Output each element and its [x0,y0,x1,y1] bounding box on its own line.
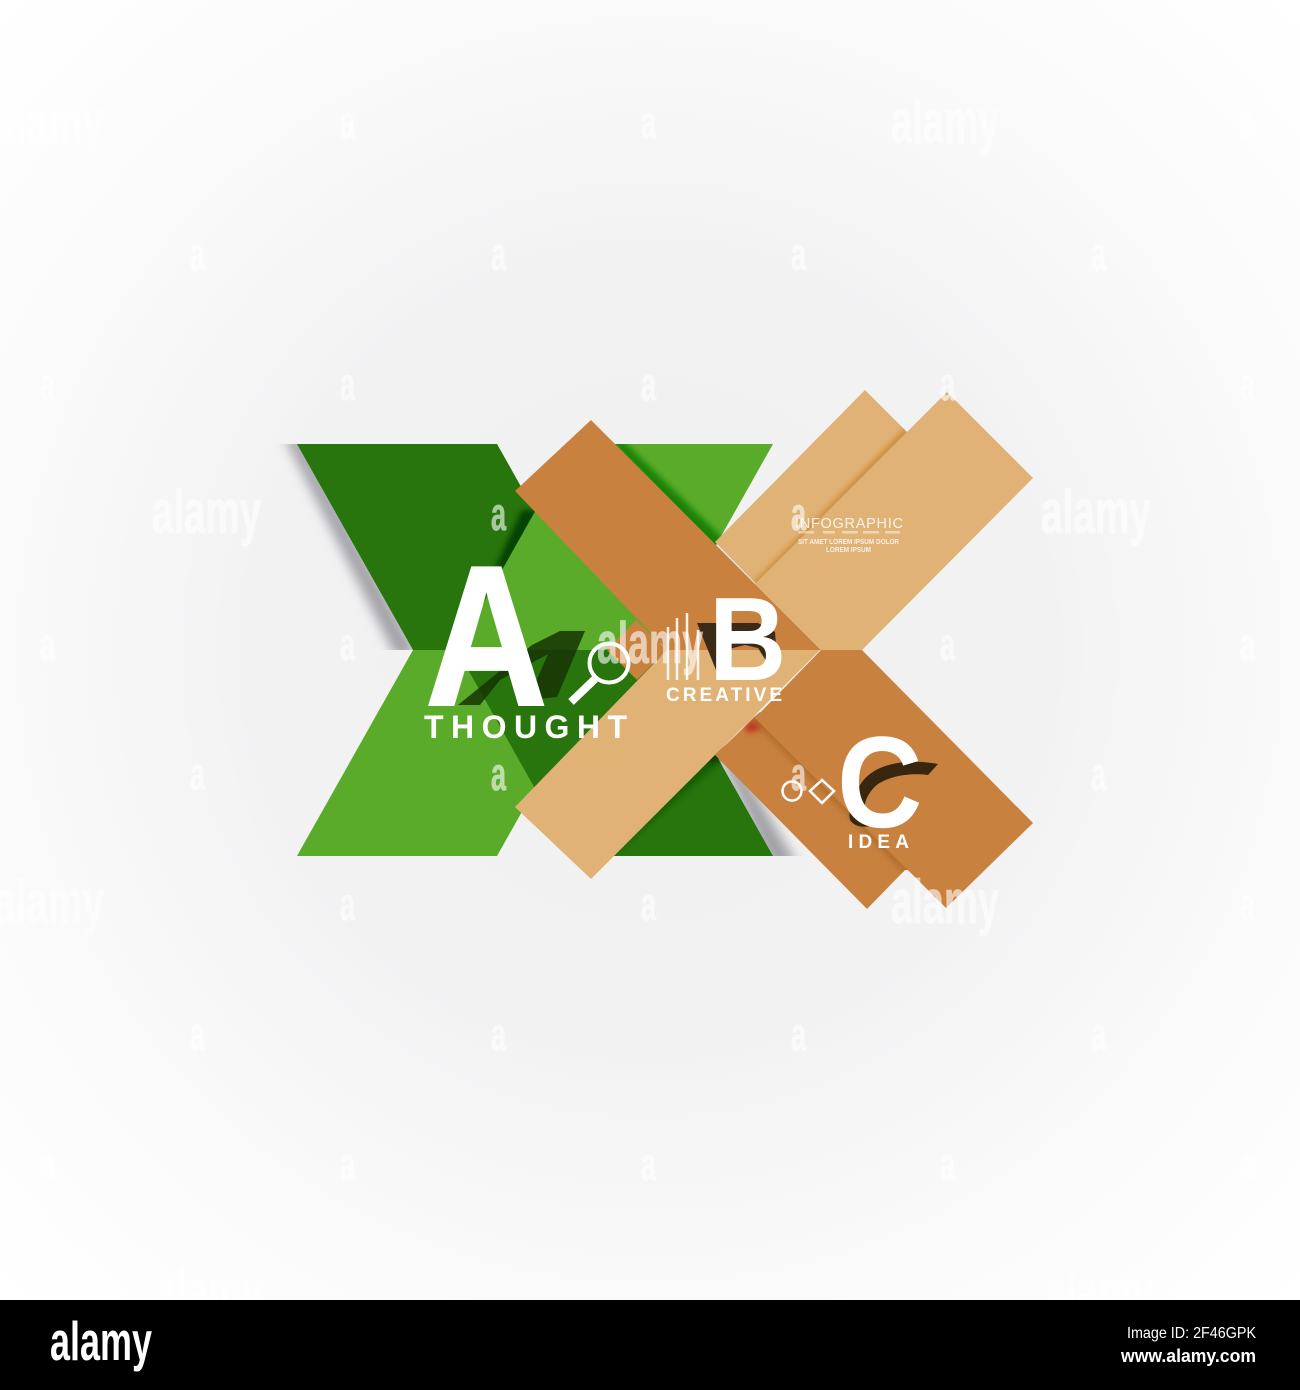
footer logo: alamy [50,1310,152,1372]
watermarks: a [1091,228,1106,280]
watermarks: a [491,748,506,800]
panel: upper right light green [457,444,773,650]
watermarks: a [641,878,656,930]
panel: rear brown bar [715,712,915,909]
brown diamond at centre [607,620,667,680]
watermarks: a [40,618,55,670]
watermarks: a [1240,1138,1255,1190]
footer bar [0,1300,1300,1390]
shadow: right of lower green panel [718,759,800,856]
label: THOUGHT: THOUGHT [424,709,627,745]
text block: infographic caption: LOREM IPSUM [826,545,871,554]
watermarks: a [1240,358,1255,410]
watermarks: a [791,488,806,540]
watermarks: a [340,1138,355,1190]
letter: A: A [425,525,548,748]
shadow on dark green along tan bar [616,758,721,854]
letter shadow: C [850,762,938,827]
text block: infographic caption [795,516,903,554]
watermarks: a [340,618,355,670]
watermarks: a [791,1008,806,1060]
watermarks: a [40,1138,55,1190]
shadow: left of upper green panel [284,436,418,656]
letter: B: B [709,573,786,705]
watermarks: alamy [891,88,999,157]
watermarks: a [340,358,355,410]
watermarks: a [190,228,205,280]
watermarks: a [190,1008,205,1060]
fold shadow on rear tan bar [753,431,908,589]
panel: front brown bar [755,650,1033,908]
watermarks: a [641,358,656,410]
panel: lower right dark green [457,650,773,856]
watermarks: alamy [891,868,999,937]
label: IDEA: IDEA [848,832,909,853]
watermarks: alamy [597,611,703,676]
watermarks: a [940,618,955,670]
letter shadow: A [458,631,585,705]
watermarks: a [1240,618,1255,670]
watermarks: a [641,1138,656,1190]
watermarks: alamy [1045,1258,1153,1327]
panel: green X shape [297,436,773,856]
panel: front tan bar [755,392,1033,650]
red fold shadow [744,716,768,733]
letter: C: C [837,710,922,855]
watermarks: alamy [1041,478,1151,547]
panel: rear tan bar [715,390,912,590]
letter shadow: B [697,623,778,680]
watermarks: a [340,878,355,930]
watermarks: a [791,748,806,800]
panel: top left brown bar [515,420,821,650]
icon: circle and diamond [782,780,834,803]
watermarks: a [40,358,55,410]
watermarks: a [1240,96,1255,148]
label: CREATIVE: CREATIVE [666,685,782,706]
watermarks: a [1240,878,1255,930]
watermarks: a [1091,748,1106,800]
panel: lower left light green [297,650,613,856]
watermarks: a [940,358,955,410]
text block: infographic caption: INFOGRAPHIC [795,516,903,532]
icon: magnifier [571,644,628,702]
watermarks: a [940,1138,955,1190]
shadow on light green along brown bar [615,444,722,545]
watermarks: a [1091,1008,1106,1060]
watermarks: a [491,228,506,280]
text block: infographic caption: SIT AMET LOREM IPSUM DOLOR [798,537,899,546]
watermarks: a [340,96,355,148]
panel: upper left dark green [297,444,613,650]
watermarks: a [491,488,506,540]
watermarks: a [491,1008,506,1060]
footer image id: Image ID: 2F46GPK [1127,1325,1256,1342]
watermarks: alamy [155,1258,263,1327]
footer url: www.alamy.com [1120,1346,1256,1366]
panel: lower tan bar [515,650,820,879]
watermarks: a [641,96,656,148]
icon: vertical bars [668,613,698,680]
watermarks: alamy [152,478,261,547]
watermarks: a [791,228,806,280]
fold shadow on rear brown bar [752,716,908,872]
dark apex under tan bar [700,738,726,762]
watermarks: a [190,748,205,800]
shadow on dark green along light green edge [493,508,535,570]
